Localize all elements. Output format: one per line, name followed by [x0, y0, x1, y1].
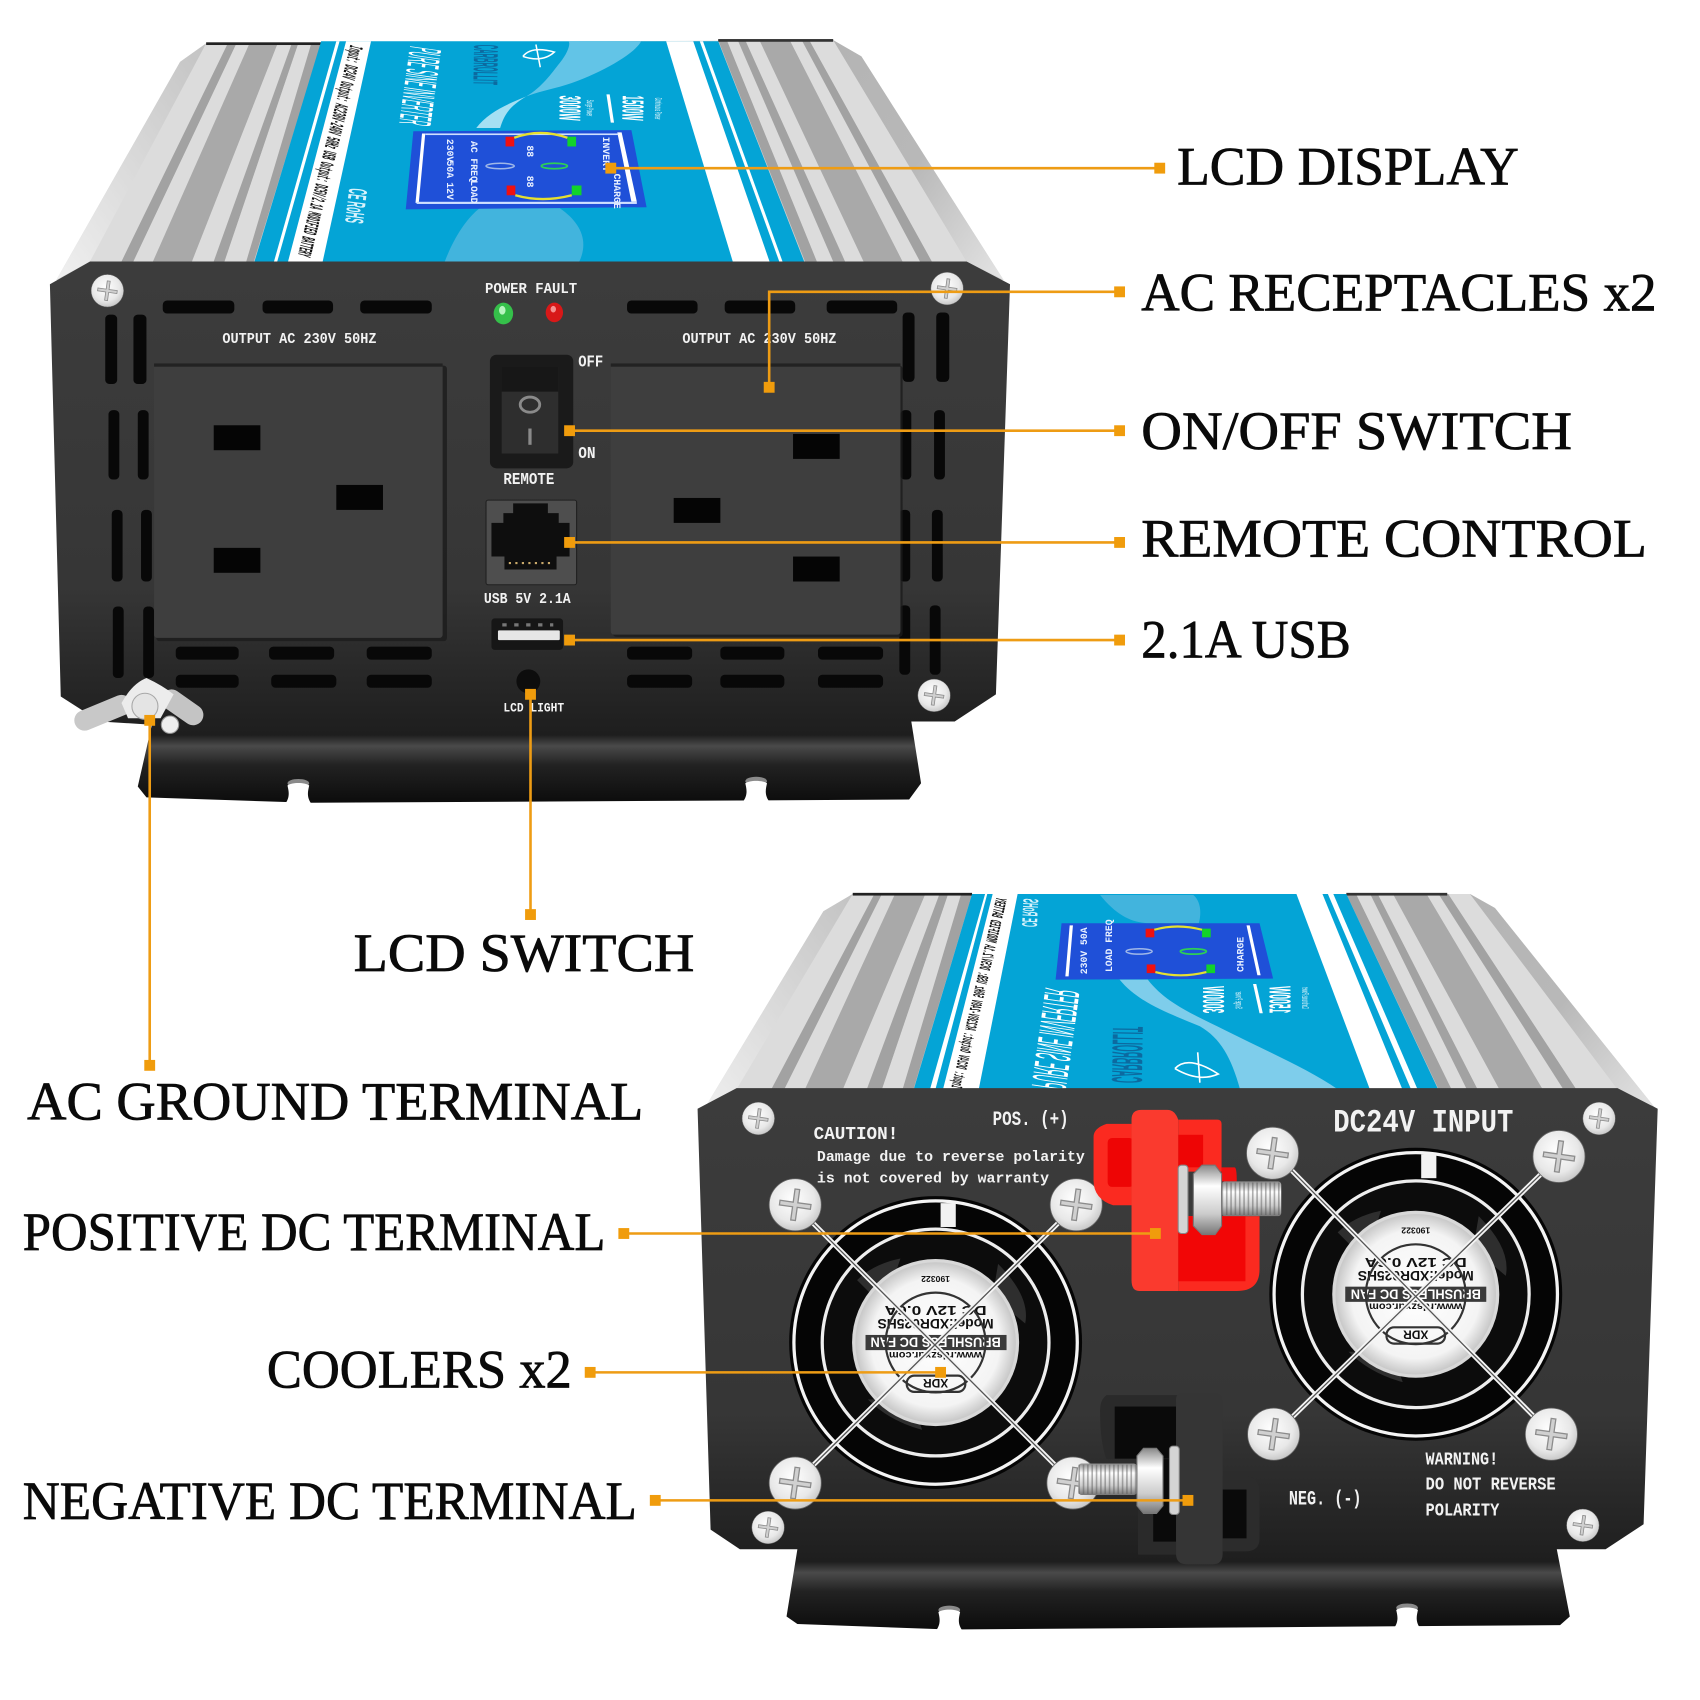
rear panel text: NEG. (-): [1289, 1489, 1362, 1512]
LCD screen: INVERT: [600, 137, 611, 172]
callout: AC ground terminal: [27, 715, 643, 1132]
rear panel text: [814, 1105, 1556, 1522]
aluminium case bottom unit: [700, 893, 1657, 1116]
LCD light button: [503, 669, 564, 716]
rear panel text: DC24V INPUT: [1333, 1105, 1513, 1142]
positive terminal red cover: [1094, 1110, 1281, 1291]
rear plate notches: [935, 1603, 1421, 1632]
callout: remote control: REMOTE CONTROL: [1141, 509, 1647, 569]
LCD screen: 88: [524, 145, 535, 157]
fan hub label: www.rdszxdr.com: [889, 1349, 983, 1360]
label text: Surge Power: [584, 100, 595, 116]
fan hub label: XDR: [923, 1376, 948, 1390]
callout: AC receptacles: AC RECEPTACLES x2: [1141, 262, 1657, 322]
label text: 1500W: [1262, 986, 1295, 1013]
aluminium case top: [56, 39, 1004, 280]
blue label bottom unit: [913, 894, 1439, 1092]
callout: positive DC terminal: POSITIVE DC TERMINAL: [23, 1202, 605, 1262]
rear panel text: DO NOT REVERSE: [1426, 1475, 1556, 1496]
LCD screen: [406, 130, 647, 209]
rocker switch: OFF: [578, 353, 603, 372]
text: CE RoHS: [1017, 898, 1043, 928]
label text: CE RoHS: [339, 187, 373, 225]
label text: CARBROLLIT: [1102, 1026, 1151, 1083]
text: Input: DC24V Output: AC230V-240V 50Hz USB: DC5V/2.1A MODIFIED BATTERY: [947, 896, 1010, 1090]
USB port: [491, 618, 563, 650]
power fault indicators: POWER FAULT: [485, 280, 577, 298]
LCD screen: 230V: [444, 139, 455, 162]
panel screws: [91, 272, 963, 712]
fan hub label: Model:XDR025HS: [878, 1316, 994, 1332]
callout: on/off switch: ON/OFF SWITCH: [1141, 401, 1572, 461]
rear panel text: WARNING!: [1426, 1450, 1498, 1471]
rear panel: [698, 1088, 1658, 1629]
LCD screen: 12V: [444, 182, 455, 200]
blue label on top cover: [254, 41, 805, 264]
callout: AC ground terminal: AC GROUND TERMINAL: [27, 1072, 643, 1132]
label text: CARBROLLIT: [465, 44, 504, 85]
rear panel text: POS. (+): [993, 1109, 1069, 1132]
fan hub label: 190322: [1401, 1226, 1430, 1236]
label text: Continuous Power: [1299, 987, 1310, 1009]
label text: [292, 43, 663, 259]
RJ45 remote port: [484, 500, 577, 608]
callout: coolers: COOLERS x2: [267, 1340, 572, 1400]
label text: 3000W: [1196, 986, 1229, 1013]
LCD screen bottom unit: [1056, 919, 1273, 980]
rocker switch: [490, 353, 603, 489]
base plate mount notches: [284, 777, 770, 805]
LCD screen bottom unit: LOAD FREQ: [1104, 919, 1115, 972]
rocker switch: REMOTE: [503, 470, 555, 489]
callout: on/off switch: [564, 401, 1572, 461]
LCD light button: LCD LIGHT: [503, 701, 564, 716]
callout: coolers: [267, 1340, 946, 1400]
LCD screen bottom unit: 230V 50A: [1079, 927, 1090, 974]
LCD screen: AC: [468, 141, 479, 153]
socket caption left: OUTPUT AC 230V 50HZ: [222, 330, 376, 348]
callout: USB: 2.1A USB: [1141, 609, 1351, 669]
LCD screen: 50A: [444, 161, 455, 178]
cooling fan right: [1269, 1148, 1562, 1441]
top inverter: front view: PURE SINE INVERTER: [389, 44, 451, 129]
text: PURE SINE INVERTER: [1021, 986, 1090, 1092]
callout: negative DC terminal: [23, 1471, 1193, 1531]
label wave graphics: [445, 41, 641, 261]
label wave graphics: [1100, 895, 1338, 1089]
fan hub label: 190322: [921, 1274, 950, 1284]
fan hub label: DC 12V 0.6A: [884, 1303, 987, 1318]
front panel: [50, 261, 1010, 803]
label text: [947, 896, 1310, 1092]
rear panel text: CAUTION!: [814, 1124, 898, 1145]
LCD screen: CHARGE: [611, 174, 622, 209]
cooling fan left: [789, 1196, 1082, 1489]
fan hub label: [1345, 1226, 1486, 1344]
top inverter: front view: [50, 39, 1010, 805]
fan hub label: www.rdszxdr.com: [1369, 1300, 1464, 1311]
fan hub label: BRUSHLESS DC FAN: [1351, 1286, 1481, 1302]
rear panel screws: [742, 1102, 1615, 1544]
callout: positive DC terminal: [23, 1202, 1161, 1262]
callout: AC receptacles: [764, 262, 1657, 393]
bottom inverter: rear view: [698, 893, 1658, 1632]
callout: remote control: [564, 509, 1647, 569]
vent slots: [105, 301, 949, 688]
RJ45 remote port: USB 5V 2.1A: [484, 590, 571, 608]
label text: Surge Power: [1233, 991, 1244, 1009]
LCD screen: 88: [524, 176, 535, 188]
label text: 1500W: [615, 95, 649, 121]
label text: Continuous Power: [652, 98, 663, 120]
AC socket left: [154, 363, 447, 641]
fan hub label: Model:XDR025HS: [1358, 1268, 1474, 1284]
fan hub label: BRUSHLESS DC FAN: [871, 1335, 1001, 1351]
rear panel text: POLARITY: [1426, 1501, 1500, 1522]
fan hub label: XDR: [1403, 1328, 1428, 1342]
LCD screen: FREQ: [468, 158, 479, 182]
AC socket right: [611, 363, 903, 637]
callout: LCD display: LCD DISPLAY: [1177, 136, 1519, 196]
callout: LCD switch: [354, 689, 694, 983]
callout: LCD display: [605, 136, 1519, 196]
top inverter: front view: Input: DC24V Output: AC230V-240V 50Hz USB Output: DC5V/2.1A MODIFIED BATTERY: [292, 43, 366, 259]
callout: negative DC terminal: NEGATIVE DC TERMINAL: [23, 1471, 637, 1531]
rocker switch: ON: [578, 444, 596, 463]
rear panel text: Damage due to reverse polarity: [817, 1148, 1085, 1166]
callout: LCD switch: LCD SWITCH: [354, 923, 694, 983]
label text: 3000W: [552, 95, 586, 121]
fan hub label: [866, 1274, 1007, 1392]
LCD screen: LOAD: [468, 180, 479, 204]
LCD screen bottom unit: CHARGE: [1235, 937, 1246, 972]
negative terminal black cover: [1078, 1393, 1260, 1564]
fan hub label: DC 12V 0.6A: [1364, 1255, 1467, 1270]
callout: USB: [564, 609, 1351, 669]
rear panel text: is not covered by warranty: [817, 1170, 1049, 1188]
socket caption right: OUTPUT AC 230V 50HZ: [682, 330, 836, 348]
power fault indicators: [485, 280, 577, 324]
ground wing nut: [85, 678, 193, 733]
